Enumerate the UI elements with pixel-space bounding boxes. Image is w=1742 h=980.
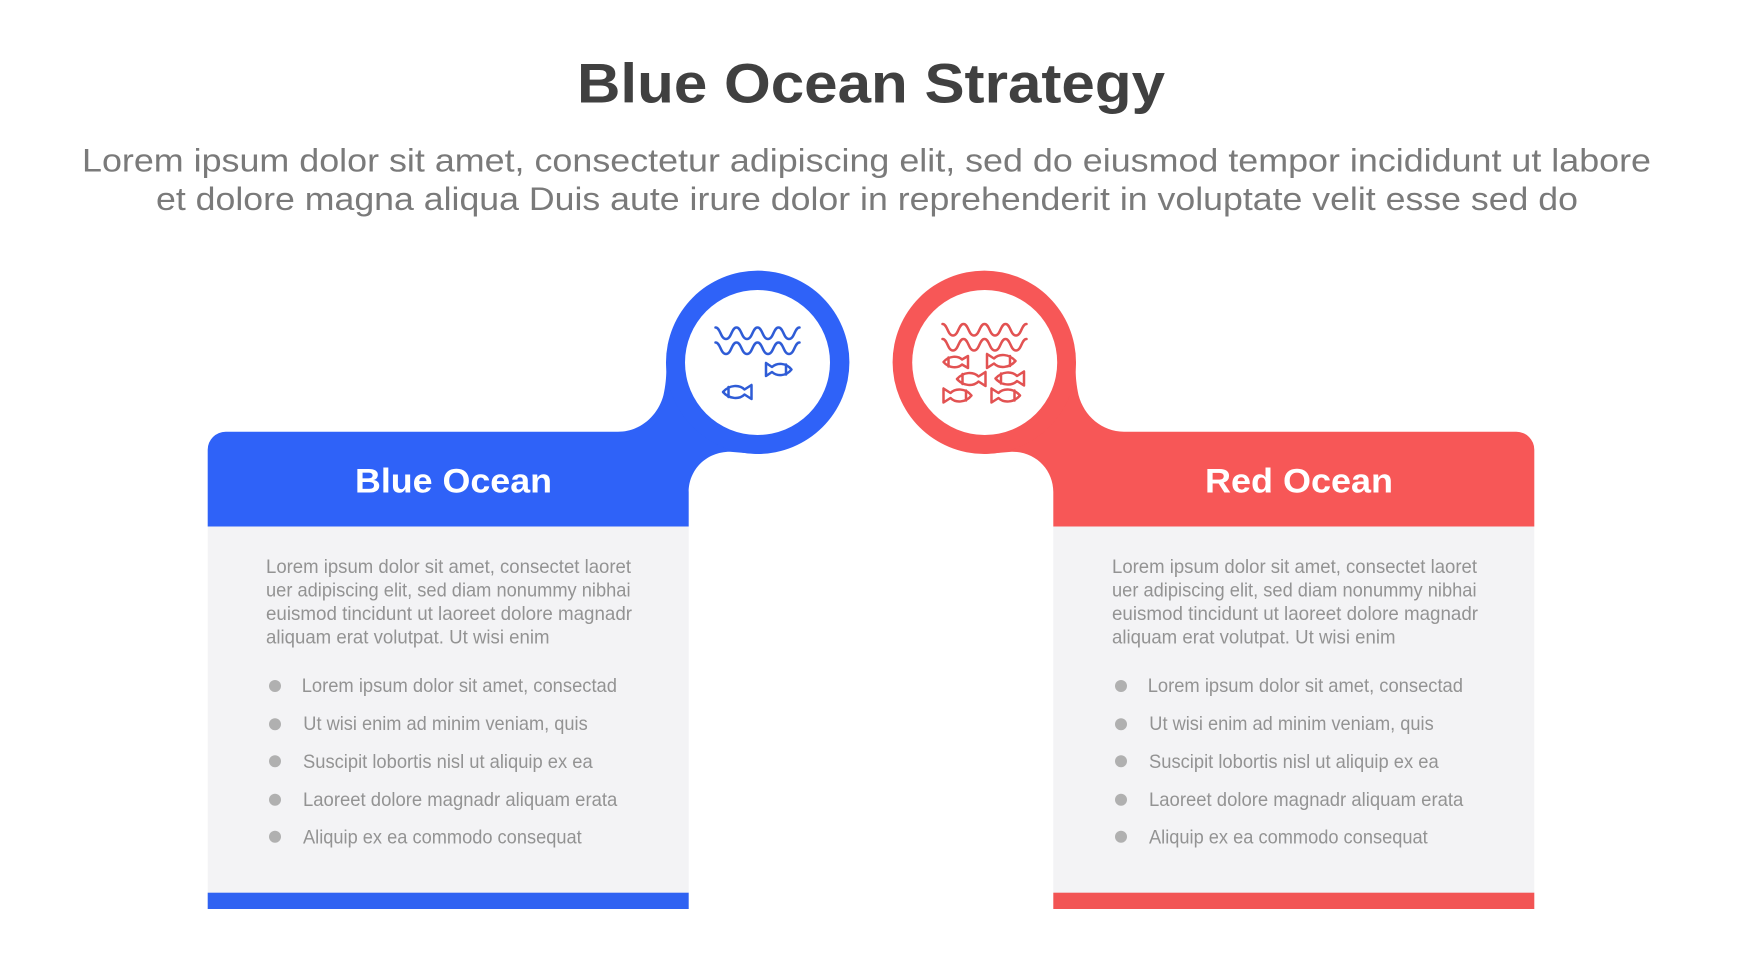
- paragraph: euismod tincidunt ut laoreet dolore magnadr: [1112, 603, 1478, 625]
- bullet list: Lorem ipsum dolor sit amet, consectad: [302, 675, 617, 697]
- subtitle: et dolore magna aliqua Duis aute irure dolor in reprehenderit in voluptate velit esse sed do: [156, 181, 1578, 217]
- subtitle: Lorem ipsum dolor sit amet, consectetur adipiscing elit, sed do eiusmod tempor incididunt ut labore: [82, 143, 1651, 179]
- panel: red ocean: [893, 271, 1534, 909]
- body background: [1053, 526, 1534, 893]
- bullet list: Suscipit lobortis nisl ut aliquip ex ea: [303, 751, 593, 773]
- bullet list: [269, 675, 617, 849]
- bullet list: Lorem ipsum dolor sit amet, consectad: [1148, 675, 1463, 697]
- paragraph: [1112, 556, 1478, 648]
- paragraph: uer adipiscing elit, sed diam nonummy nibhai: [1112, 580, 1476, 602]
- footer bar: [1053, 893, 1534, 909]
- bullet list: Ut wisi enim ad minim veniam, quis: [1149, 713, 1434, 735]
- paragraph: uer adipiscing elit, sed diam nonummy nibhai: [266, 580, 630, 602]
- bullet list: Laoreet dolore magnadr aliquam erata: [1149, 789, 1463, 811]
- bullet list: Aliquip ex ea commodo consequat: [303, 827, 582, 849]
- body background: [208, 526, 689, 893]
- bullet list: Ut wisi enim ad minim veniam, quis: [303, 713, 588, 735]
- bullet list: Suscipit lobortis nisl ut aliquip ex ea: [1149, 751, 1439, 773]
- subtitle: [82, 143, 1651, 217]
- footer bar: [208, 893, 689, 909]
- header with connected circle: [208, 271, 849, 526]
- paragraph: euismod tincidunt ut laoreet dolore magnadr: [266, 603, 632, 625]
- icon: waves and two fish: [716, 328, 800, 399]
- title: Blue Ocean Strategy: [577, 51, 1165, 114]
- panel: blue ocean: [208, 271, 849, 909]
- paragraph: Lorem ipsum dolor sit amet, consectet laoret: [1112, 556, 1478, 578]
- bullet list: Aliquip ex ea commodo consequat: [1149, 827, 1428, 849]
- heading: Red Ocean: [1205, 463, 1393, 501]
- bullet list: Laoreet dolore magnadr aliquam erata: [303, 789, 617, 811]
- header with connected circle: [893, 271, 1534, 526]
- paragraph: aliquam erat volutpat. Ut wisi enim: [266, 626, 550, 648]
- paragraph: [266, 556, 632, 648]
- paragraph: aliquam erat volutpat. Ut wisi enim: [1112, 626, 1396, 648]
- bullet list: [1115, 675, 1463, 849]
- heading: Blue Ocean: [355, 463, 552, 501]
- paragraph: Lorem ipsum dolor sit amet, consectet laoret: [266, 556, 632, 578]
- icon: waves and six fish: [942, 324, 1026, 402]
